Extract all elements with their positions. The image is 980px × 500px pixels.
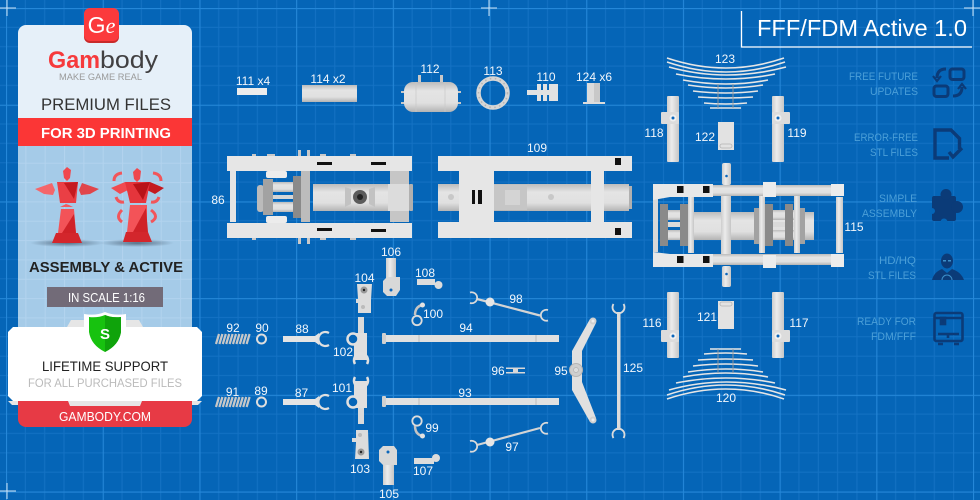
part 123 leaf spring: 123 [715,52,735,66]
part 90 ring: 90 [255,321,269,335]
bottom red footer: GAMBODY.COM [59,409,151,424]
feature: hd/hq stl files [868,254,964,282]
part 122: 122 [695,130,715,144]
part 117: 117 [789,316,809,330]
feature: free future updates: FREE FUTURE [849,71,918,83]
part 113 ring [478,64,508,108]
part 122 [695,122,734,150]
part 111: 111 x4 [236,74,270,88]
part 108: 108 [415,266,435,280]
logo badge: Ge [88,12,116,38]
icon: update arrows [933,69,966,96]
part 88 fork rod: 88 [295,322,309,336]
part 119 [772,96,807,162]
part 98 lever: 98 [509,292,523,306]
feature: simple assembly: ASSEMBLY [862,208,918,220]
part 115 axle assembly: 115 [844,220,864,234]
part 93 rod: 93 [458,386,472,400]
part 102: 102 [333,345,353,359]
part 103 [350,430,370,476]
part 99 [412,416,439,438]
part 118 [644,96,679,162]
icon: 3D printer [934,313,962,344]
part 114: 114 x2 [310,72,346,86]
feature: hd/hq stl files: STL FILES [868,270,916,282]
part 87 fork rod: 87 [295,386,308,400]
part 101: 101 [332,381,352,395]
assembly heading: ASSEMBLY & ACTIVE [29,260,183,276]
part 120 leaf spring: 120 [716,391,736,405]
part 106 [381,245,401,296]
part 90 ring [255,321,269,344]
part 93 rod [382,386,559,407]
feature: ready for fdm/fff: READY FOR [857,316,916,328]
part 125 rod [612,304,643,438]
feature: error-free stl files: STL FILES [870,147,918,159]
part 104: 104 [354,271,375,285]
part 87 fork rod [283,386,329,409]
part 102 [333,317,368,364]
part 112 tank: 112 [420,62,440,76]
panel: premium files sidebar [8,8,202,427]
part 121: 121 [697,310,717,324]
part 88 fork rod [283,322,329,346]
feature: hd/hq stl files: HD/HQ [879,255,916,267]
lifetime support heading: LIFETIME SUPPORT [42,358,168,374]
part 92 spring [216,321,250,344]
brand name: body [100,47,158,74]
part 116: 116 [642,316,662,330]
part 96: 96 [491,364,505,378]
figure: assembled model [30,167,104,247]
part 94 rod: 94 [459,321,473,335]
part 108 [415,266,442,289]
part 91 spring [216,385,250,407]
part 123 leaf spring [667,52,786,108]
icon: document with check [935,130,962,158]
part 124 [576,70,612,104]
feature: error-free stl files: ERROR-FREE [854,132,918,144]
part 107 [413,454,440,478]
support card [8,312,202,406]
part 109 frame: 109 [527,141,547,155]
part 91 spring: 91 [226,385,239,399]
part 105 [379,446,399,500]
premium files heading: PREMIUM FILES [41,95,171,114]
bottom red footer [18,395,192,427]
part 101 [332,377,368,424]
scale badge: IN SCALE 1:16 [68,291,145,305]
brand name [48,47,158,74]
feature: error-free stl files [854,130,962,159]
shield icon [84,312,126,352]
icon: puzzle piece [929,189,963,226]
part 100: 100 [423,307,443,321]
red band: FOR 3D PRINTING [41,125,171,142]
part 119: 119 [787,126,807,140]
tagline: MAKE GAME REAL [59,72,142,83]
part 121 [697,301,734,329]
shield icon: S [100,326,110,343]
figure: articulated model with rotation arrows [100,168,174,247]
part 111 [236,74,270,95]
lower panel background [18,146,192,336]
part 112 tank [401,62,461,112]
part 99: 99 [425,421,439,435]
part 107: 107 [413,464,433,478]
brand name: Gam [48,47,100,74]
part 116 [642,292,679,358]
lifetime support subtext: FOR ALL PURCHASED FILES [28,376,182,390]
part 86 frame [211,150,413,244]
part 113 ring: 113 [483,64,503,78]
icon: figure bust [932,254,964,280]
part 95 yoke [554,318,596,424]
part 89 ring [254,384,268,406]
part 98 lever [470,292,548,321]
part 95 yoke: 95 [554,364,568,378]
part 103: 103 [350,462,370,476]
part 97 lever: 97 [505,440,519,454]
part 109 frame [438,141,632,238]
panel top background [18,25,192,118]
title box: FFF/FDM Active 1.0 [757,15,967,41]
part 115 axle assembly [653,163,864,287]
part 118: 118 [644,126,664,140]
part 117 [772,292,809,358]
part 114 [302,72,357,102]
part 100 [412,302,443,325]
part 125 rod: 125 [623,361,643,375]
scale badge [47,287,163,307]
part 94 rod [382,321,559,344]
title box [742,11,972,47]
part 96 [491,364,525,378]
part 120 leaf spring [667,349,786,405]
part 104 [354,271,375,313]
feature: ready for fdm/fff: FDM/FFF [871,331,916,343]
part 92 spring: 92 [226,321,240,335]
part 110 [527,70,558,101]
part 97 lever [470,423,548,454]
red band [18,118,192,146]
feature: ready for fdm/fff [857,313,962,344]
feature: simple assembly [862,189,963,226]
feature: simple assembly: SIMPLE [879,193,917,205]
part 106: 106 [381,245,401,259]
feature: free future updates: UPDATES [870,86,918,98]
part 89 ring: 89 [254,384,268,398]
part 124: 124 x6 [576,70,612,84]
part 86 frame: 86 [211,193,225,207]
logo badge [84,8,119,43]
feature: free future updates [849,69,966,98]
part 110: 110 [536,70,556,84]
